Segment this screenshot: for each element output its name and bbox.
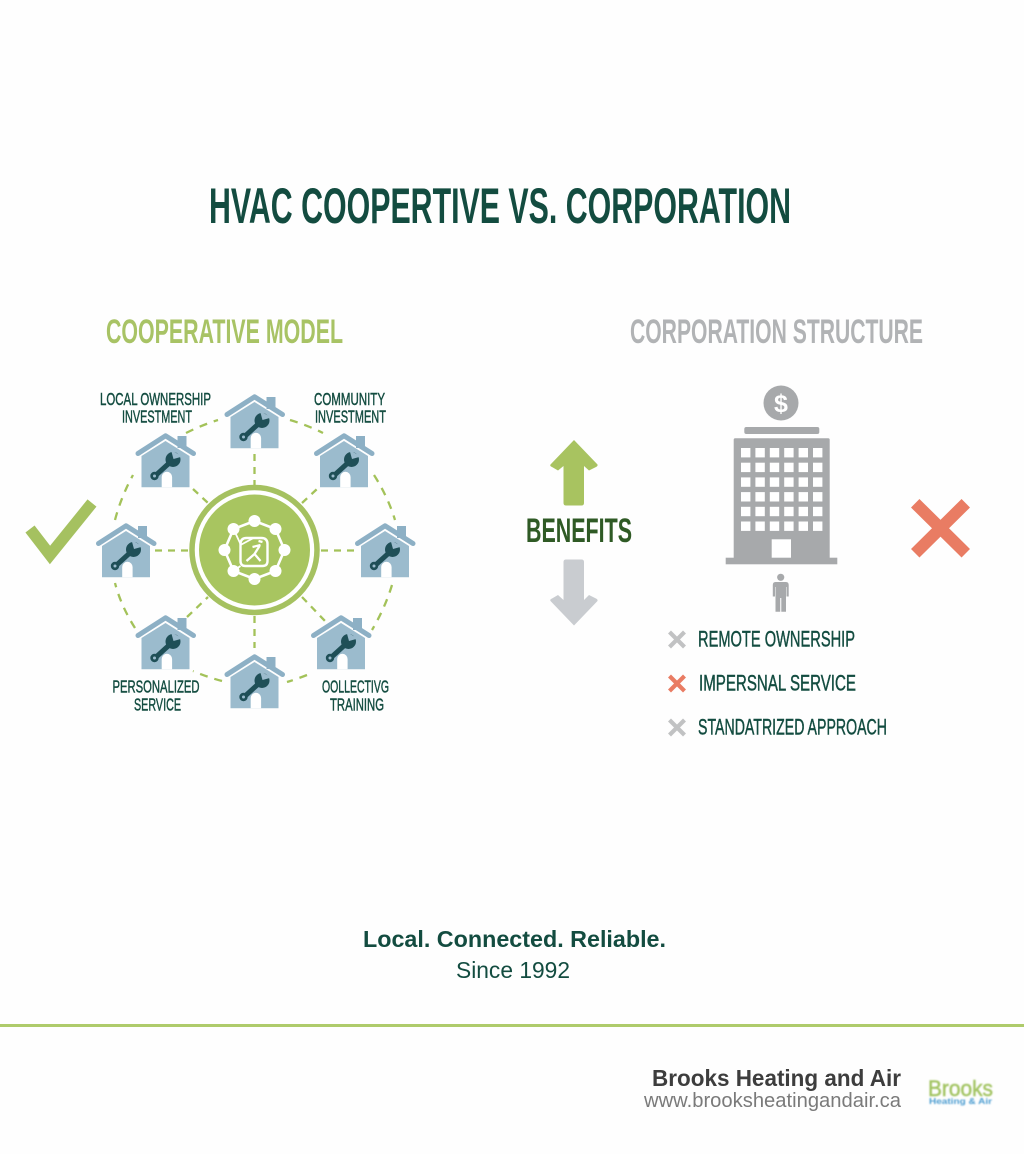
label: community investment [314, 389, 386, 426]
label: collective training: OOLLECTIVG [322, 676, 389, 696]
label: collective training [322, 676, 389, 714]
label: collective training: TRAINING [330, 694, 384, 714]
arrow: down [550, 560, 598, 626]
footer: company name and url: www.brooksheatingandair.ca [643, 1090, 902, 1112]
footer: company name and url [643, 1065, 902, 1112]
item: impersonal service [670, 671, 856, 696]
logo: Brooks [928, 1076, 993, 1101]
icon: dollar coin: $ [774, 390, 788, 418]
heading: cooperative model: COOPERATIVE MODEL [106, 313, 343, 351]
tagline: Local. Connected. Reliable. [363, 926, 666, 952]
item: standardized approach: STANDATRIZED APPROACH [698, 715, 887, 740]
dashed ring connecting houses [115, 420, 395, 682]
icon: big red x [920, 508, 962, 549]
panel: corporation building [726, 386, 837, 612]
icon: dollar coin [764, 386, 798, 420]
icon: person [773, 574, 789, 612]
list: corporation drawbacks [670, 627, 887, 740]
item: remote ownership: REMOTE OWNERSHIP [698, 627, 855, 652]
footer divider [0, 1024, 1024, 1027]
logo: Heating & Air [929, 1097, 992, 1106]
icon: check mark [30, 503, 92, 555]
tagline: Since 1992 [456, 957, 570, 983]
dashed spokes [155, 454, 356, 648]
label: personalized service: SERVICE [134, 694, 181, 714]
item: standardized approach [670, 715, 887, 740]
building [726, 427, 837, 564]
label: community investment: INVESTMENT [315, 406, 386, 426]
panel: cooperative network diagram [98, 389, 413, 714]
footer: company name and url: Brooks Heating and Air [652, 1065, 901, 1091]
arrow: up [550, 440, 598, 506]
label: local ownership investment [100, 389, 211, 426]
benefits label: BENEFITS [526, 512, 632, 550]
item: remote ownership [670, 627, 855, 652]
house icons [98, 397, 413, 708]
label: local ownership investment: INVESTMENT [122, 406, 192, 426]
tagline [363, 926, 666, 983]
label: local ownership investment: LOCAL OWNERSHIP [100, 389, 211, 409]
label: personalized service: PERSONALIZED [112, 676, 200, 696]
central hub [192, 488, 317, 612]
label: personalized service [112, 676, 200, 714]
label: community investment: COMMUNITY [314, 389, 385, 409]
item: impersonal service: IMPERSNAL SERVICE [699, 671, 856, 696]
